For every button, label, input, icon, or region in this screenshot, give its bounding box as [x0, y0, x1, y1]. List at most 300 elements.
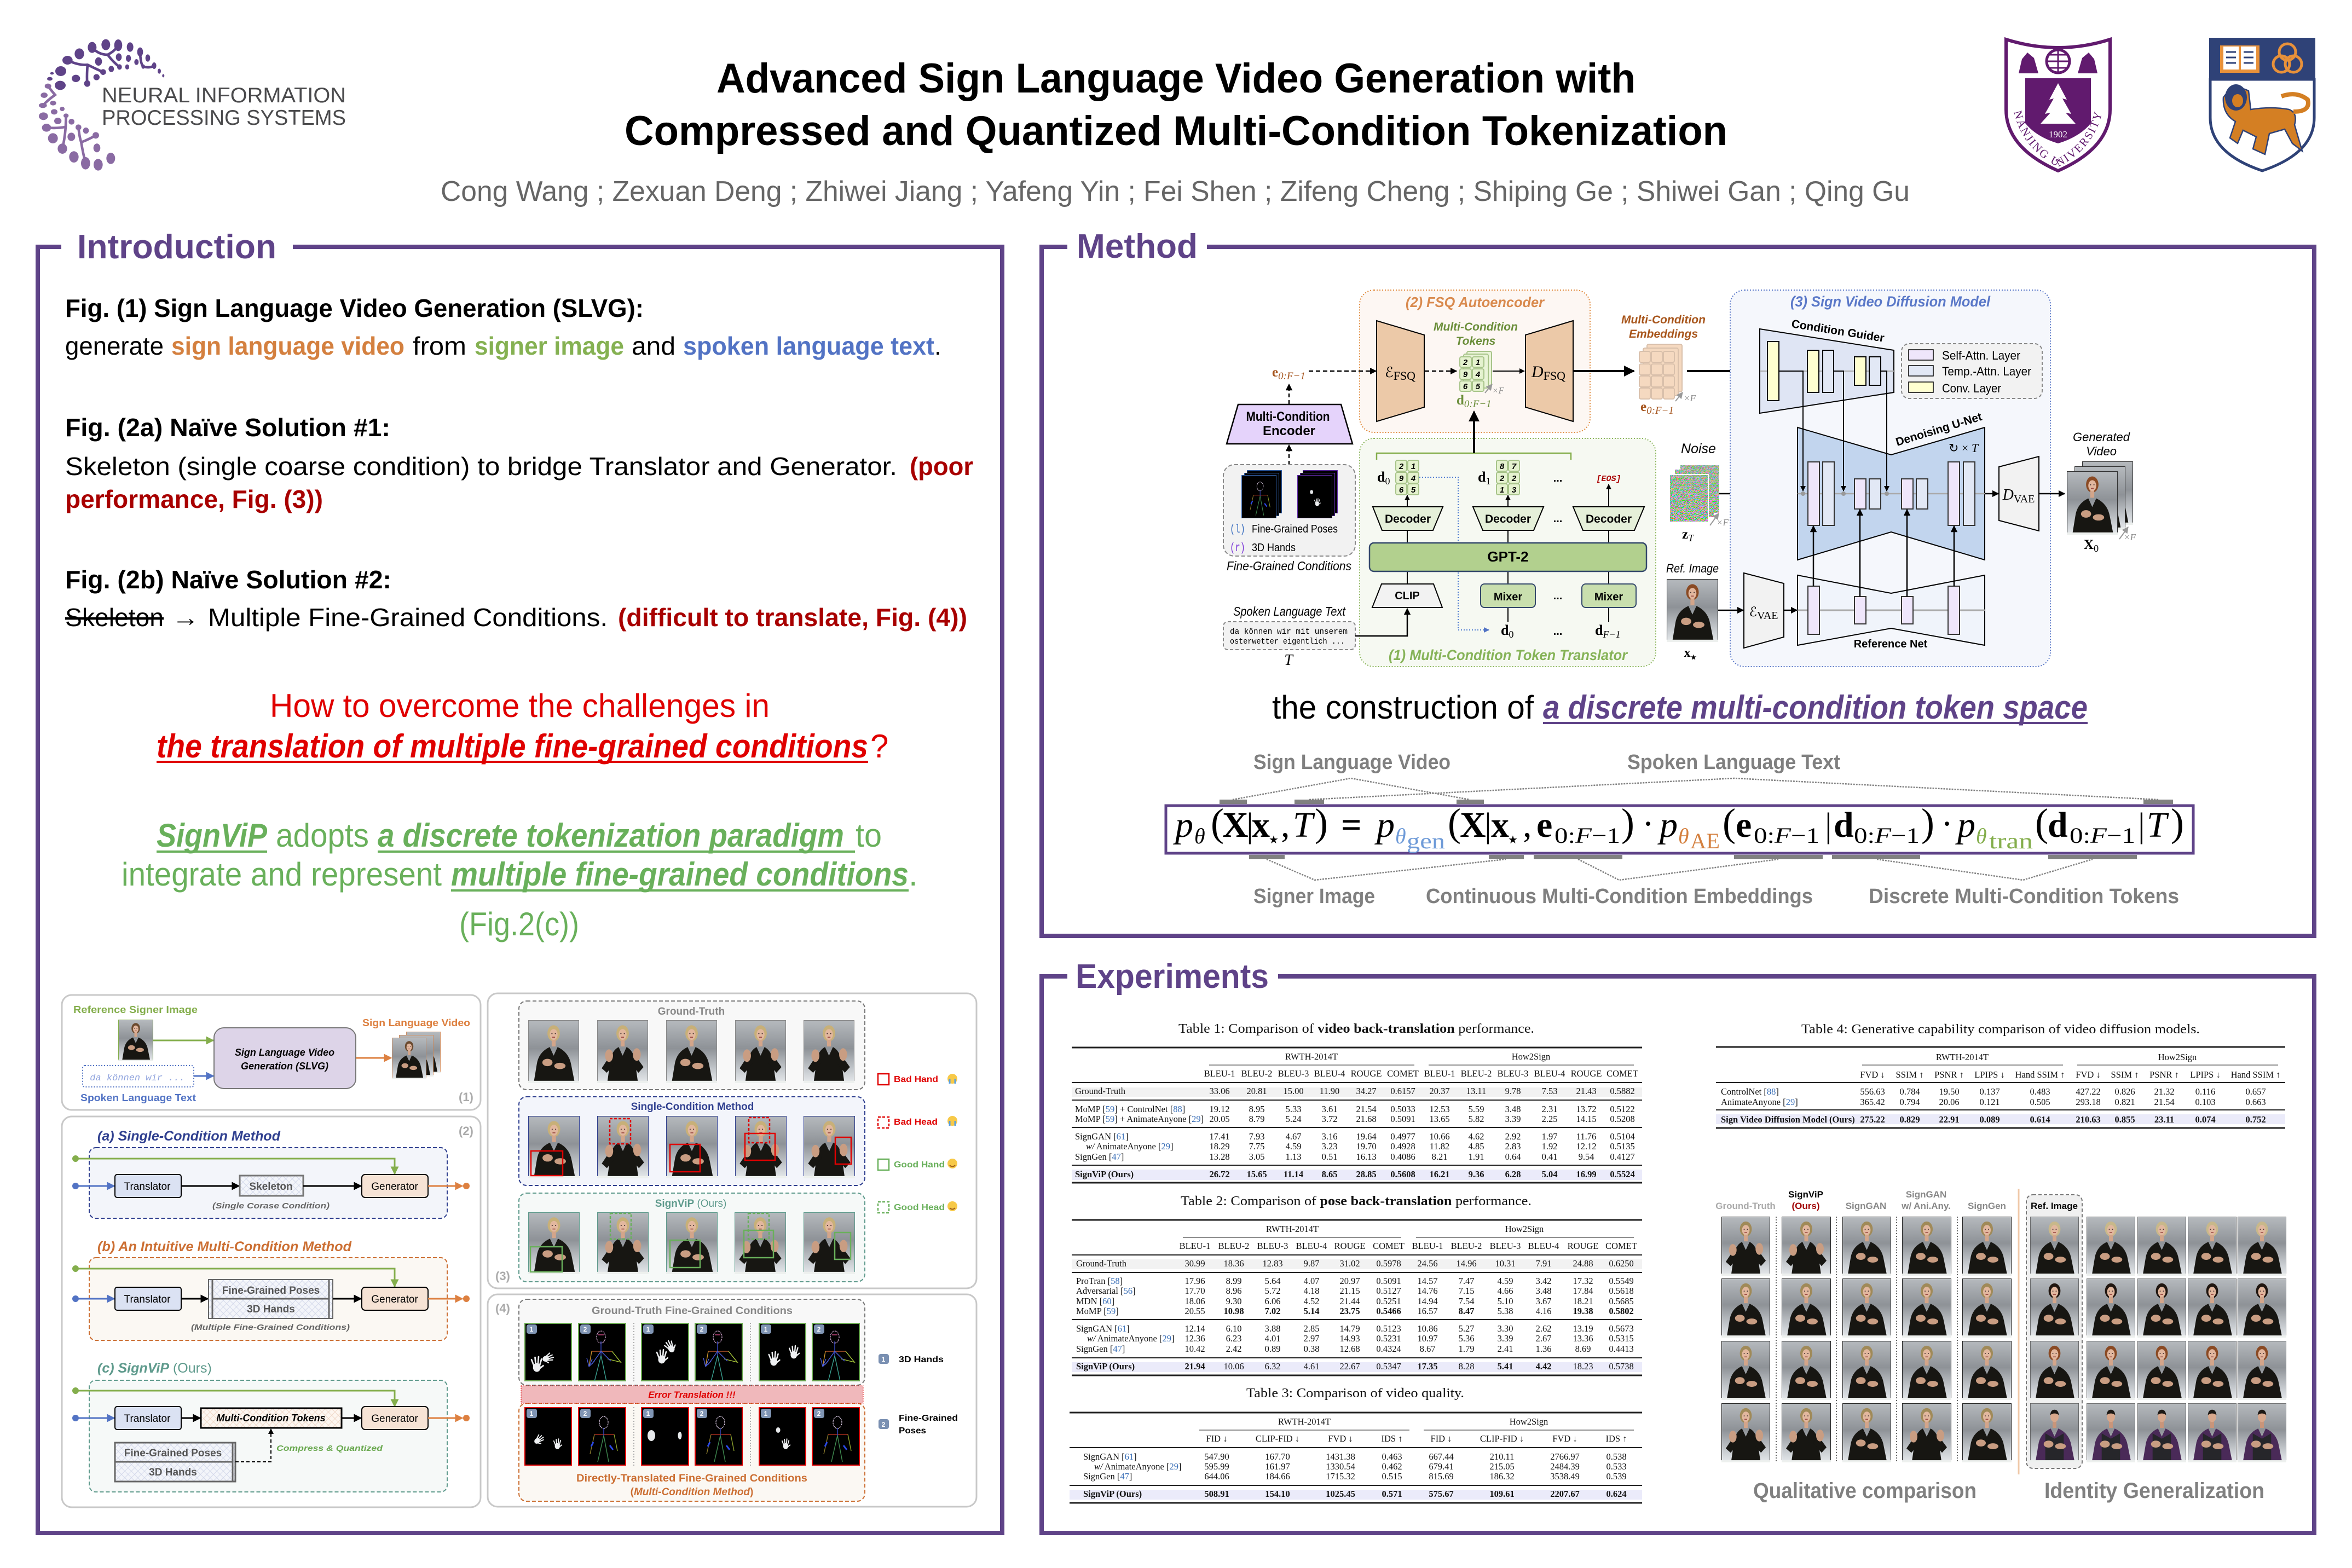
- table 1: 2.31: [1542, 1104, 1557, 1114]
- table 1: How2Sign: [1512, 1051, 1550, 1062]
- table 1: 3.16: [1322, 1131, 1337, 1142]
- block: condition guider: Condition Guider: [1790, 317, 1885, 345]
- arrow: noise to U-Net: [1719, 493, 1797, 494]
- diagram: multi-condition: [72, 1258, 470, 1340]
- table 1: 3.72: [1322, 1114, 1337, 1124]
- equation: d: [2048, 805, 2068, 845]
- table 4: 0.074: [2195, 1114, 2216, 1125]
- heading: SignViP: (c) SignViP (Ours): [97, 1361, 212, 1376]
- panel: FSQ autoencoder: FSQ: [1544, 369, 1565, 383]
- box: multi-condition encoder: Encoder: [1263, 424, 1315, 438]
- encoders: CLIP and mixers: Mixer: [1494, 591, 1522, 603]
- table 2: 3.42: [1536, 1276, 1551, 1286]
- caption: qualitative comparison: Qualitative comparison: [1753, 1479, 1977, 1503]
- table 3: IDS ↑: [1382, 1433, 1402, 1444]
- table 2: 5.27: [1459, 1323, 1474, 1334]
- arrow: FSQ decoder to embeddings: [1573, 370, 1634, 372]
- tokens d1: 3: [1512, 485, 1517, 495]
- divider: vertical: [2018, 1189, 2020, 1474]
- table 1: 7.93: [1249, 1131, 1264, 1142]
- table 1: BLEU-4: [1314, 1068, 1345, 1079]
- table 4: 20.06: [1939, 1097, 1960, 1107]
- ellipses: [1553, 472, 1562, 638]
- tokens d1: 8: [1500, 462, 1505, 471]
- label: X0: X: [2084, 537, 2094, 552]
- table 3: FID ↓: [1431, 1433, 1452, 1444]
- equation: X: [1460, 805, 1486, 845]
- label: EOS: [EOS]: [1596, 475, 1621, 484]
- table 3: w/ AnimateAnyone [29]: [1094, 1461, 1181, 1472]
- block: denoising U-Net: ↻ × T: [1949, 441, 1979, 455]
- text block: Fig 1: and: [632, 332, 675, 360]
- table 1: BLEU-2: [1241, 1068, 1272, 1079]
- table 1: 33.06: [1209, 1086, 1230, 1096]
- photo grid: qualitative comparison: w/ Ani.Any.: [1901, 1201, 1951, 1211]
- table 4: 0.614: [2030, 1114, 2050, 1125]
- table 1: 13.65: [1429, 1114, 1450, 1124]
- text block: Fig 1: sign language video: [171, 332, 404, 360]
- table 3: CLIP-FID ↓: [1480, 1433, 1524, 1444]
- label: generated video: [2073, 430, 2130, 458]
- tokens d0: [1377, 460, 1419, 495]
- band: error translation: Error Translation !!!: [648, 1390, 736, 1400]
- legend: hand and head quality: Bad Head: [894, 1118, 938, 1127]
- table 3: FVD ↓: [1552, 1433, 1577, 1444]
- tokens d0: 1: [1411, 462, 1415, 471]
- table 2: How2Sign: [1505, 1224, 1544, 1234]
- heading: Method: Method: [1077, 228, 1198, 265]
- text block: Fig 2b: Skeleton: [65, 603, 164, 632]
- label: noise: Noise: [1681, 441, 1716, 456]
- table 1: 0.5208: [1610, 1114, 1635, 1124]
- table 4: 556.63: [1860, 1086, 1885, 1097]
- table 2: 16.57: [1417, 1306, 1438, 1316]
- table 4: [1716, 1022, 2285, 1128]
- table 1: 9.78: [1505, 1086, 1521, 1096]
- ellipses: ...: [1553, 472, 1562, 484]
- panel: token translator: [1355, 412, 1656, 667]
- table 2: 8.99: [1226, 1276, 1241, 1286]
- panel: figure 4 conditions: [488, 1294, 976, 1507]
- group: ground-truth conditions: 1: [646, 1326, 650, 1333]
- photo grid: qualitative comparison: SignGAN: [1906, 1189, 1946, 1200]
- block: denoising U-Net: Denoising U-Net: [1894, 410, 1984, 449]
- block: VAE decoder: VAE: [2014, 493, 2035, 505]
- equation: T: [1293, 805, 1315, 845]
- table 2: 7.91: [1536, 1258, 1551, 1269]
- row: ground truth: [519, 1001, 865, 1090]
- table 1: 4.62: [1469, 1131, 1484, 1142]
- table 1: Table 1: Comparison of video back-translation performance.: [1178, 1022, 1534, 1036]
- callout: SignViP answer: integrate and represent: [122, 856, 442, 893]
- table 4: 0.657: [2245, 1086, 2266, 1097]
- equation: =: [1341, 805, 1362, 845]
- table 2: 5.14: [1304, 1306, 1319, 1316]
- table 4: 293.18: [2076, 1097, 2101, 1107]
- equation: |: [1246, 806, 1253, 844]
- table 1: COMET: [1387, 1068, 1419, 1079]
- table 4: How2Sign: [2158, 1052, 2197, 1062]
- diagram: single-condition: Generator: [371, 1181, 418, 1193]
- table 2: 5.38: [1498, 1306, 1513, 1316]
- table 2: 9.30: [1226, 1296, 1241, 1306]
- group: ground-truth conditions: 2: [817, 1326, 821, 1333]
- diagram: SignViP: Multi-Condition Tokens: [216, 1413, 326, 1424]
- table 2: 14.96: [1456, 1258, 1477, 1269]
- equation: ): [1315, 801, 1328, 844]
- tag: (3): (3): [495, 1269, 510, 1283]
- tag: (4): (4): [495, 1301, 510, 1315]
- heading: token space: [1272, 689, 2088, 726]
- table 2: 12.83: [1262, 1258, 1283, 1269]
- label: spoken language text: Spoken Language Text: [1233, 604, 1346, 618]
- equation: ): [1921, 801, 1934, 844]
- table 2: 10.86: [1417, 1323, 1438, 1334]
- tokens d1: 2: [1499, 474, 1505, 483]
- legend: hand and head quality: Bad Hand: [894, 1075, 938, 1084]
- table 2: 0.5802: [1609, 1306, 1634, 1316]
- table 2: 17.96: [1184, 1276, 1205, 1286]
- group: directly-translated conditions: (Multi-Condition Method): [631, 1486, 753, 1498]
- table 1: 18.29: [1209, 1141, 1230, 1152]
- callout: question: ?: [870, 728, 888, 765]
- table 1: 9.36: [1469, 1169, 1484, 1179]
- logo: Nanjing University: NANJING UNIVERSITY: [2014, 110, 2101, 167]
- tokens d0: 5: [1411, 485, 1416, 495]
- equation: p: [1374, 805, 1395, 845]
- tokens d0: 9: [1399, 474, 1404, 483]
- table 1: BLEU-1: [1424, 1068, 1455, 1079]
- panel: FSQ autoencoder: FSQ: [1394, 369, 1415, 383]
- box: fine-grained conditions: 3D Hands: [1252, 542, 1296, 554]
- table 2: 4.59: [1498, 1276, 1513, 1286]
- table 2: 0.89: [1265, 1344, 1280, 1354]
- table 2: 14.79: [1339, 1323, 1360, 1334]
- table 2: 5.64: [1265, 1276, 1280, 1286]
- photo grid: qualitative comparison: SignGAN: [1846, 1201, 1886, 1211]
- table 4: 0.829: [1899, 1114, 1920, 1125]
- table 2: 0.38: [1304, 1344, 1319, 1354]
- table 3: SignGAN [61]: [1083, 1451, 1137, 1462]
- photo grid: identity generalization: [2026, 1195, 2286, 1468]
- text block: Fig 2a: Skeleton (single coarse condition) to bridge Translator and Generator.: [65, 452, 897, 481]
- ellipses: ...: [1553, 626, 1562, 638]
- table 1: ROUGE: [1571, 1068, 1602, 1079]
- label: e input: 0:F−1: [1278, 371, 1305, 382]
- arrows: condition guider to U-Net: [1779, 371, 1887, 491]
- table 1: RWTH-2014T: [1285, 1051, 1338, 1062]
- equation: ·: [1941, 804, 1953, 844]
- table 1: 0.41: [1542, 1152, 1557, 1162]
- tokens d1: 2: [1511, 474, 1517, 483]
- equation: ): [2171, 801, 2184, 844]
- table 1: 9.54: [1579, 1152, 1594, 1162]
- table 1: 13.11: [1466, 1086, 1486, 1096]
- text block: Fig 2b: [65, 565, 967, 632]
- table 1: SignViP (Ours): [1075, 1169, 1134, 1179]
- box: SLVG: Generation (SLVG): [241, 1061, 328, 1072]
- table 1: 3.48: [1505, 1104, 1521, 1114]
- logo: university crest: [2209, 38, 2315, 171]
- text block: Fig 2a: [65, 413, 973, 513]
- table 4: 427.22: [2076, 1086, 2101, 1097]
- legend: hand and head quality: Good Head: [894, 1203, 945, 1212]
- table 1: 0.6157: [1390, 1086, 1415, 1096]
- table 1: 11.90: [1320, 1086, 1339, 1096]
- table 2: ROUGE: [1334, 1241, 1365, 1251]
- panel: FSQ autoencoder: Multi-Condition: [1434, 321, 1518, 333]
- box: fine-grained conditions: (l): [1230, 523, 1245, 536]
- table 1: SignGAN [61]: [1075, 1131, 1129, 1142]
- table 4: 0.137: [1979, 1086, 2000, 1097]
- table 1: 16.13: [1356, 1152, 1377, 1162]
- table 1: 4.67: [1286, 1131, 1301, 1142]
- panel: sign video diffusion model: [1718, 290, 2065, 667]
- equation: θ: [1976, 824, 1987, 848]
- box: SLVG: [214, 1028, 356, 1089]
- block: VAE decoder: [1999, 456, 2039, 531]
- equation: x: [1491, 805, 1509, 845]
- block: reference net: Reference Net: [1854, 638, 1928, 650]
- box: GPT-2: [1369, 543, 1646, 571]
- equation: (: [1723, 801, 1736, 844]
- callout: SignViP answer: [122, 817, 918, 942]
- table 1: 34.27: [1356, 1086, 1377, 1096]
- table 2: 10.31: [1495, 1258, 1516, 1269]
- table 1: 3.23: [1322, 1141, 1337, 1152]
- tokens d1: 1: [1500, 485, 1504, 495]
- table 3: 1025.45: [1326, 1489, 1355, 1499]
- table 2: 0.5685: [1609, 1296, 1634, 1306]
- text block: Fig 1: signer image: [475, 332, 624, 360]
- table 3: How2Sign: [1510, 1416, 1548, 1427]
- label: x star: x: [1684, 646, 1691, 660]
- table 1: 21.68: [1356, 1114, 1377, 1124]
- table 2: 10.97: [1417, 1333, 1438, 1344]
- table 1: 12.12: [1576, 1141, 1597, 1152]
- table 2: 6.32: [1265, 1361, 1280, 1372]
- table 1: 1.97: [1542, 1131, 1557, 1142]
- table 1: 0.5524: [1610, 1169, 1635, 1179]
- table 2: 4.52: [1304, 1296, 1319, 1306]
- table 4: PSNR ↑: [1934, 1069, 1964, 1080]
- tokens: stacked grid: 9: [1463, 370, 1468, 379]
- table 2: 7.47: [1459, 1276, 1474, 1286]
- row: SignViP: SignViP (Ours): [655, 1198, 726, 1210]
- equation: p: [1955, 805, 1975, 845]
- table 2: 4.66: [1498, 1286, 1513, 1296]
- table 4: 0.121: [1979, 1097, 2000, 1107]
- decoder labels: Decoder: [1485, 513, 1531, 525]
- table 4: ControlNet [88]: [1721, 1086, 1779, 1097]
- equation: tran: [1989, 829, 2033, 853]
- table 3: 595.99: [1204, 1461, 1229, 1472]
- logo: NeurIPS: NEURAL INFORMATION: [102, 84, 346, 107]
- table 4: RWTH-2014T: [1936, 1052, 1989, 1062]
- arrow: SLVG to video: [356, 1057, 391, 1058]
- table 2: 0.5091: [1376, 1276, 1401, 1286]
- embeddings cube: [1639, 344, 1682, 399]
- equation: θ: [1395, 824, 1406, 848]
- text block: Fig 1: spoken language text: [683, 332, 934, 360]
- table 3: CLIP-FID ↓: [1256, 1433, 1299, 1444]
- equation: ·: [1642, 804, 1654, 844]
- table 4: PSNR ↑: [2149, 1069, 2179, 1080]
- tokens: stacked grid: ×F: [1492, 385, 1504, 396]
- label: times F: ×F: [2124, 532, 2136, 542]
- table 2: 10.06: [1223, 1361, 1244, 1372]
- table 3: 161.97: [1265, 1461, 1290, 1472]
- box: multi-condition encoder: Multi-Condition: [1246, 409, 1330, 424]
- table 2: ProTran [58]: [1076, 1276, 1123, 1286]
- table 1: 11.76: [1576, 1131, 1596, 1142]
- label: ref image: Ref. Image: [1666, 562, 1719, 575]
- table 2: 7.54: [1459, 1296, 1474, 1306]
- table 2: 0.4324: [1376, 1344, 1401, 1354]
- table 1: 11.14: [1284, 1169, 1303, 1179]
- equation: ,: [1281, 805, 1290, 845]
- labels: d outputs: F−1: [1602, 629, 1621, 640]
- heading: token space: a discrete multi-condition token space: [1543, 689, 2088, 726]
- diagram: multi-condition: Translator: [124, 1294, 171, 1305]
- table 2: COMET: [1373, 1241, 1405, 1251]
- table 4: 0.855: [2114, 1114, 2135, 1125]
- decoder labels: [1385, 513, 1632, 525]
- table 2: 2.85: [1304, 1323, 1319, 1334]
- table 3: 0.571: [1382, 1489, 1402, 1499]
- text block: Fig 2b: Multiple Fine-Grained Conditions.: [208, 603, 608, 632]
- table 2: BLEU-2: [1451, 1241, 1482, 1251]
- panel: FSQ autoencoder: D: [1531, 363, 1544, 381]
- equation: ): [1621, 801, 1634, 844]
- label: embeddings symbol: e: [1640, 400, 1646, 414]
- label: e input: e: [1272, 365, 1278, 380]
- table 3: 0.533: [1606, 1461, 1627, 1472]
- table 2: BLEU-1: [1180, 1241, 1210, 1251]
- table 3: 0.539: [1606, 1471, 1627, 1482]
- tokens d1: d: [1478, 469, 1486, 485]
- equation: gen: [1407, 829, 1445, 853]
- table 1: 0.4127: [1610, 1152, 1635, 1162]
- box: fine-grained conditions: Fine-Grained Poses: [1252, 523, 1338, 535]
- heading: single-condition method: (a) Single-Condition Method: [97, 1129, 281, 1144]
- callout: SignViP answer: SignViP: [157, 817, 268, 854]
- table 1: 21.54: [1356, 1104, 1377, 1114]
- block: condition guider: [1760, 317, 1894, 413]
- group: directly-translated conditions: 2: [583, 1410, 587, 1417]
- table 2: BLEU-3: [1490, 1241, 1521, 1251]
- table 2: 3.67: [1536, 1296, 1551, 1306]
- ellipses: ...: [1553, 513, 1562, 525]
- table 2: BLEU-4: [1528, 1241, 1559, 1251]
- equation: (: [2035, 801, 2048, 844]
- table 1: 8.79: [1249, 1114, 1264, 1124]
- labels: d outputs: d: [1501, 622, 1509, 638]
- table 3: 210.11: [1490, 1451, 1514, 1462]
- equation: [1166, 801, 2193, 853]
- table 1: 8.21: [1432, 1152, 1447, 1162]
- table 4: 0.821: [2114, 1097, 2135, 1107]
- title: Advanced Sign Language Video Generation with: [716, 55, 1636, 102]
- table 1: 3.61: [1322, 1104, 1337, 1114]
- diagram: SignViP: Generator: [371, 1413, 418, 1425]
- table 1: 0.4977: [1390, 1131, 1415, 1142]
- table 2: 3.48: [1536, 1286, 1551, 1296]
- equation: x: [1252, 805, 1270, 845]
- table 2: 6.23: [1226, 1333, 1241, 1344]
- table 2: Table 2: Comparison of pose back-translation performance.: [1181, 1194, 1532, 1208]
- table 3: Table 3: Comparison of video quality.: [1246, 1386, 1464, 1401]
- table 2: SignGAN [61]: [1076, 1323, 1130, 1334]
- box: SLVG: Sign Language Video: [235, 1047, 334, 1058]
- table 1: BLEU-3: [1498, 1068, 1528, 1079]
- block: VAE encoder: ℰ: [1749, 604, 1757, 620]
- table 1: 0.5135: [1610, 1141, 1635, 1152]
- label: times F: [1710, 513, 1729, 528]
- arrows: reference net to U-Net: [1813, 510, 1954, 597]
- table 1: 0.5091: [1390, 1114, 1415, 1124]
- equation: e: [1536, 805, 1552, 845]
- table 2: Ground-Truth: [1076, 1258, 1127, 1269]
- equation: d: [1834, 805, 1854, 845]
- table 2: BLEU-2: [1218, 1241, 1249, 1251]
- equation: |: [1825, 806, 1832, 844]
- table 1: 3.39: [1505, 1114, 1521, 1124]
- table 3: 667.44: [1429, 1451, 1454, 1462]
- group: directly-translated conditions: Directly-Translated Fine-Grained Conditions: [576, 1473, 807, 1484]
- legend: layers: Conv. Layer: [1942, 381, 2001, 395]
- table 1: 5.82: [1469, 1114, 1484, 1124]
- table 4: Hand SSIM ↑: [2231, 1069, 2280, 1080]
- table 1: 2.92: [1505, 1131, 1521, 1142]
- photo grid: identity generalization: Ref. Image: [2031, 1201, 2078, 1211]
- legend: condition types: Fine-Grained: [899, 1414, 958, 1423]
- table 2: 10.42: [1184, 1344, 1205, 1354]
- table 2: 5.36: [1459, 1333, 1474, 1344]
- table 3: SignViP (Ours): [1083, 1489, 1142, 1499]
- table 1: 2.25: [1542, 1114, 1557, 1124]
- table 2: [1072, 1194, 1642, 1375]
- table 3: 575.67: [1429, 1489, 1454, 1499]
- label: multi-condition embeddings: [1621, 314, 1706, 340]
- table 2: 22.67: [1339, 1361, 1360, 1372]
- panel: Experiments: [1042, 958, 2314, 1533]
- tokens d0: 6: [1399, 485, 1404, 495]
- table 1: 14.15: [1576, 1114, 1597, 1124]
- box: fine-grained conditions: (r): [1230, 541, 1245, 555]
- group: directly-translated conditions: 1: [530, 1410, 534, 1417]
- table 3: 167.70: [1265, 1451, 1290, 1462]
- label: generated video: Generated: [2073, 430, 2130, 444]
- table 2: 8.28: [1459, 1361, 1474, 1372]
- table 2: 8.96: [1226, 1286, 1241, 1296]
- group: ground-truth conditions: 2: [700, 1326, 704, 1333]
- panel: sign video diffusion model: (3) Sign Video Diffusion Model: [1790, 293, 1990, 310]
- table 4: 0.752: [2245, 1114, 2266, 1125]
- group: ground-truth conditions: Ground-Truth Fine-Grained Conditions: [592, 1305, 793, 1317]
- callout: SignViP answer: to: [856, 817, 882, 854]
- table 2: 0.5123: [1376, 1323, 1401, 1334]
- table 1: 0.64: [1505, 1152, 1521, 1162]
- box: fine-grained conditions: [1223, 465, 1355, 556]
- encoders: CLIP and mixers: [1372, 584, 1636, 607]
- text block: Fig 2b: (difficult to translate, Fig. (4)): [618, 603, 967, 632]
- tokens: stacked grid: 5: [1476, 382, 1481, 391]
- box: GPT-2: GPT-2: [1487, 548, 1529, 565]
- diagram: multi-condition: Fine-Grained Poses: [222, 1285, 320, 1297]
- box: spoken text input: osterwetter eigentlich ...: [1230, 637, 1345, 646]
- table 2: 8.67: [1420, 1344, 1435, 1354]
